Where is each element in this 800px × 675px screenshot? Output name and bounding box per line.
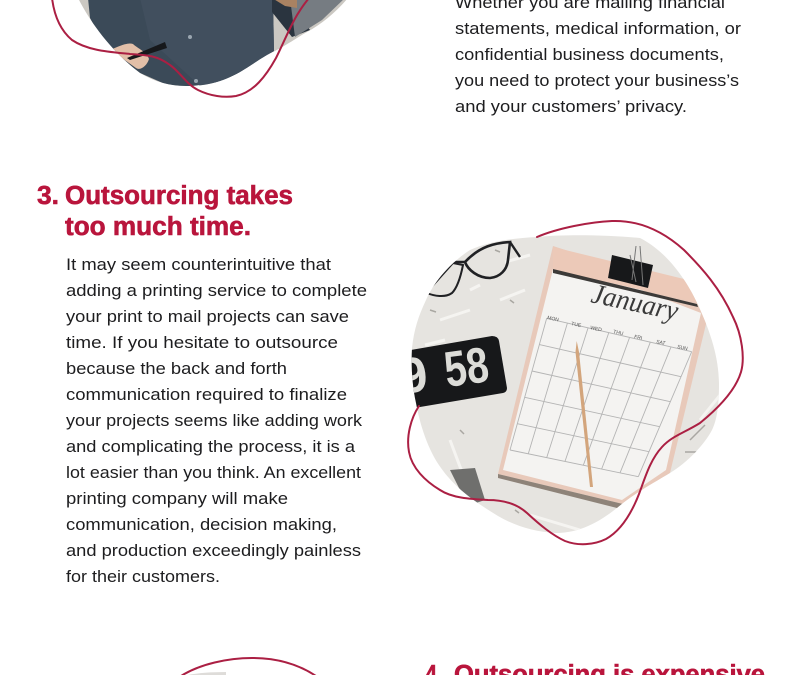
text block: section 3 body: adding a printing service to complete	[66, 281, 367, 300]
text block: section 3 body: printing company will make	[66, 489, 288, 508]
binder clip	[608, 255, 653, 288]
heading: section 3: Outsourcing takes	[65, 182, 293, 210]
clipboard	[498, 246, 707, 504]
photo: top edge of next image	[183, 672, 226, 675]
heading: section 3: too much time.	[65, 213, 251, 241]
bottom metal object	[450, 468, 485, 505]
clock: 58	[441, 336, 492, 398]
text block: section 3 body: your projects seems like adding work	[66, 411, 363, 430]
text block: section 2 end: you need to protect your business’s	[455, 71, 739, 90]
text block: section 3 body	[66, 255, 367, 586]
clock	[412, 336, 507, 408]
calendar title: January	[589, 279, 682, 327]
weekday labels: SAT	[656, 339, 666, 347]
text block: section 3 body: communication, decision making,	[66, 515, 337, 534]
weekday labels: TUE	[571, 321, 582, 329]
text block: section 3 body: because the back and forth	[66, 359, 287, 378]
weekday labels: MON	[547, 315, 560, 323]
clock: 9	[396, 346, 431, 405]
text block: section 3 body: time. If you hesitate to outsource	[66, 333, 338, 352]
text block: section 2 end	[455, 0, 741, 116]
text block: section 2 end: and your customers’ privacy.	[455, 97, 687, 116]
text block: section 2 end: confidential business documents,	[455, 45, 724, 64]
glasses	[427, 242, 520, 296]
heading: section 3	[37, 182, 293, 241]
weekday labels: THU	[613, 329, 624, 337]
text block: section 3 body: communication required to finalize	[66, 385, 347, 404]
pencil	[576, 341, 593, 487]
heading: section 3: 3.	[37, 182, 59, 210]
weekday labels: SUN	[677, 344, 689, 352]
calendar grid	[510, 318, 692, 477]
text block: section 3 body: lot easier than you think. An excellent	[66, 463, 361, 482]
photo: person in dark shirt holding a pen	[79, 0, 346, 86]
weekday labels: WED	[590, 325, 603, 333]
text block: section 3 body: It may seem counterintuitive that	[66, 255, 331, 274]
weekday labels	[547, 315, 689, 352]
text block: section 2 end: statements, medical information, or	[455, 19, 741, 38]
photo: desk calendar, glasses, clock and pencil	[412, 235, 719, 533]
decorative red outline around calendar photo	[408, 221, 743, 544]
weekday labels: FRI	[634, 334, 643, 342]
text block: section 3 body: and complicating the process, it is a	[66, 437, 356, 456]
text block: section 3 body: for their customers.	[66, 567, 220, 586]
text block: section 3 body: your print to mail projects can save	[66, 307, 349, 326]
decorative red outline of next photo	[181, 658, 316, 675]
decorative red outline around person photo	[52, 0, 309, 97]
text block: section 3 body: and production exceedingly painless	[66, 541, 361, 560]
